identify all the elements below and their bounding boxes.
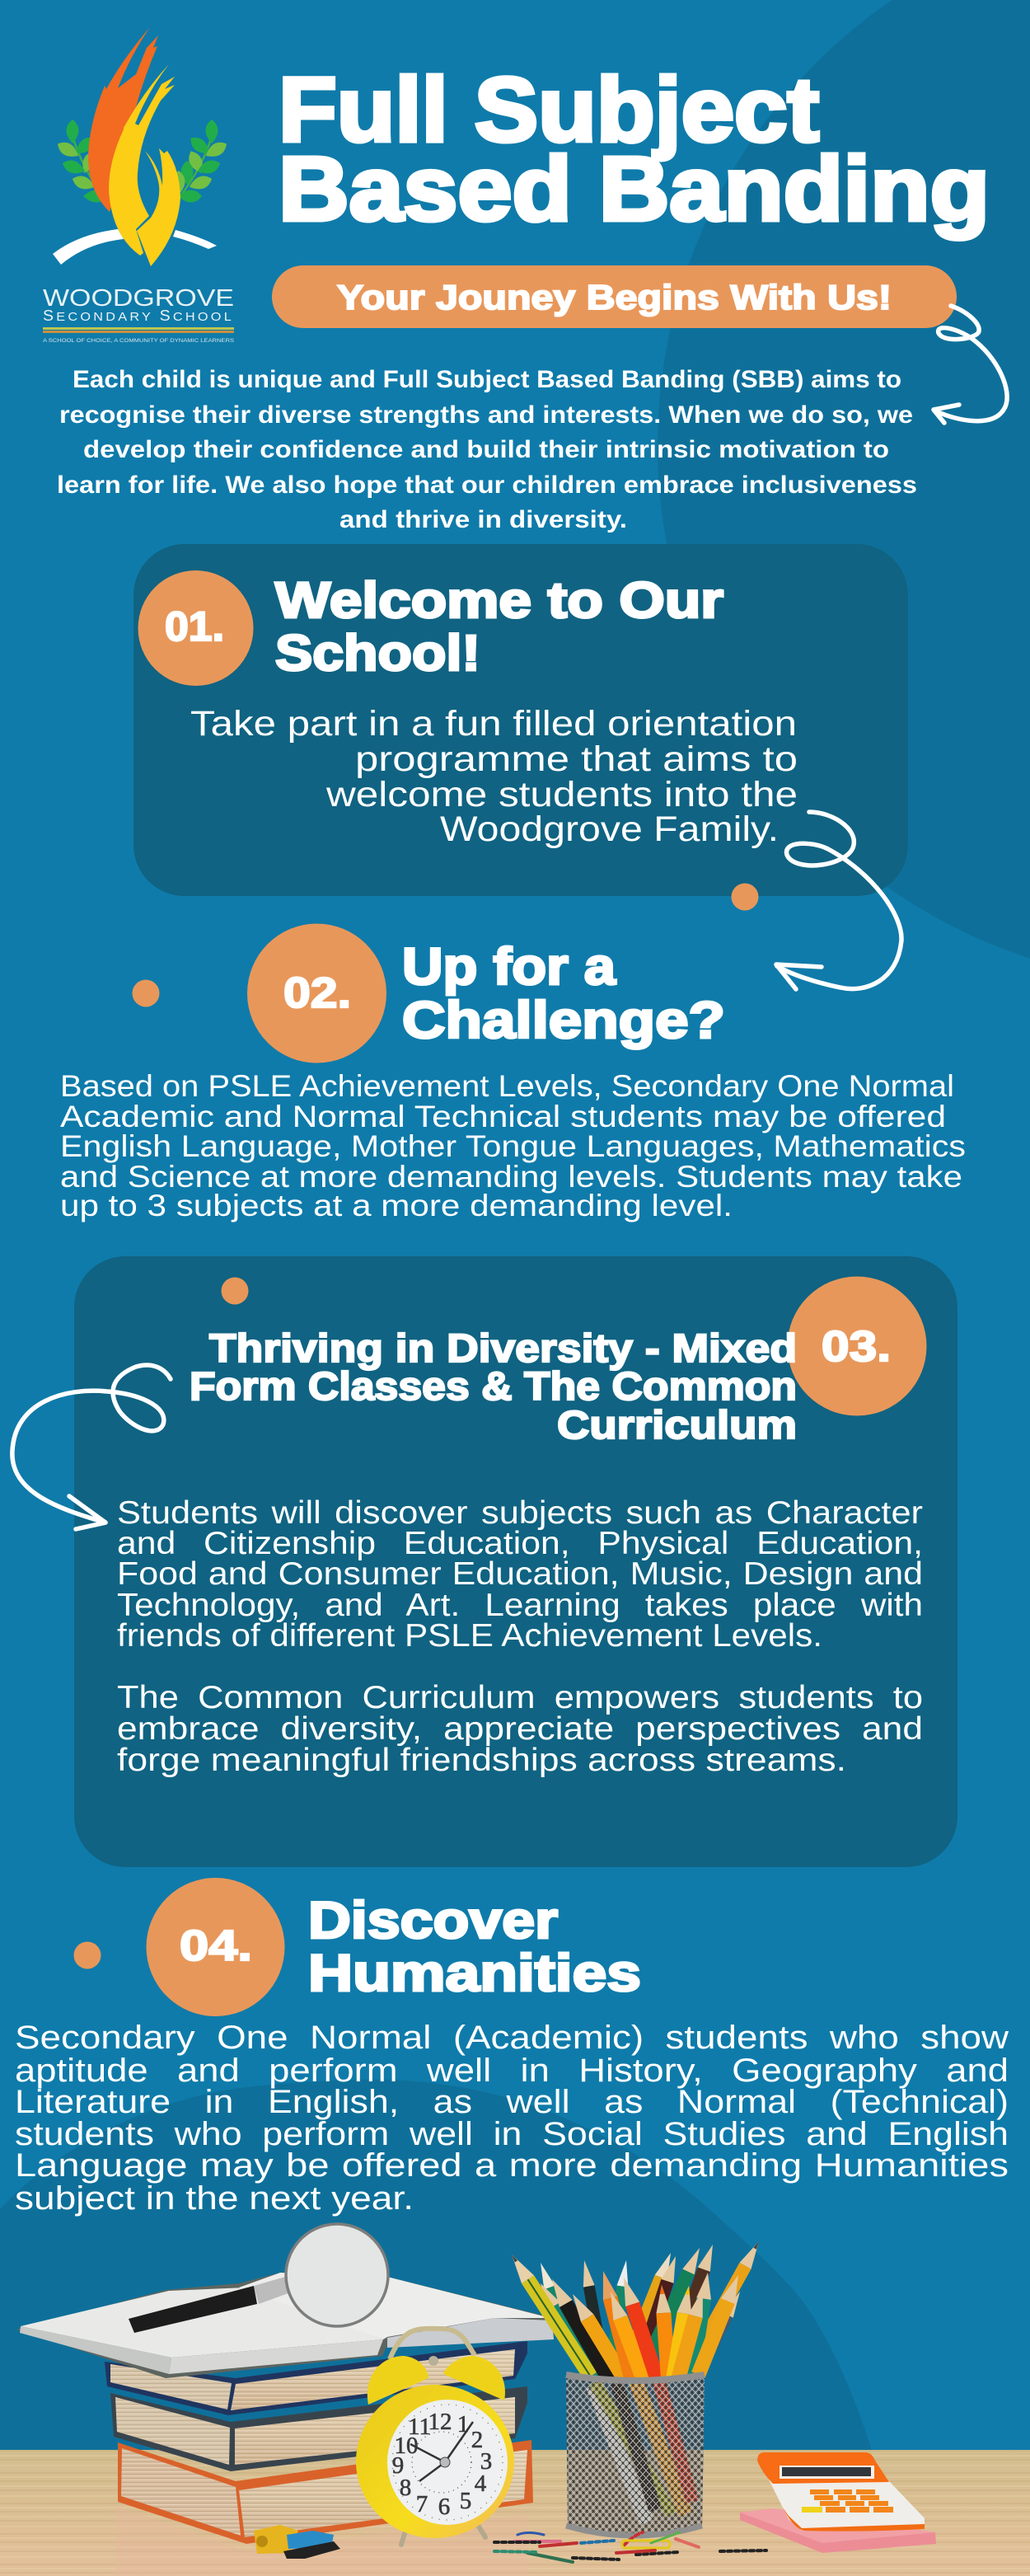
- heading 03: Form Classes & The Common: [190, 1365, 797, 1409]
- icon: white swoosh: [53, 229, 217, 265]
- clock numbers: 2: [471, 2427, 483, 2453]
- title: [279, 59, 990, 240]
- body 04: students who perform well in Social Studies and English: [15, 2116, 1009, 2152]
- body 01: Take part in a fun filled orientation: [190, 704, 797, 744]
- body 03 paragraph 2: embrace diversity, appreciate perspectives and: [117, 1711, 923, 1747]
- heading 04: Discover: [308, 1892, 558, 1950]
- clock numbers: 9: [392, 2452, 404, 2479]
- face: [387, 2400, 508, 2525]
- intro text: recognise their diverse strengths and interests. When we do so, we: [59, 401, 913, 429]
- icon: yellow flame right: [137, 148, 180, 266]
- body 03 paragraph 1: [117, 1495, 923, 1654]
- body 04: aptitude and perform well in History, Geography and: [15, 2053, 1009, 2089]
- body 01: [190, 704, 798, 849]
- body 03 paragraph 1: Food and Consumer Education, Music, Design and: [117, 1556, 923, 1592]
- feet: [401, 2522, 485, 2545]
- intro text: Each child is unique and Full Subject Based Banding (SBB) aims to: [73, 366, 901, 393]
- school name: WOODGROVE: [43, 285, 234, 312]
- body 01: Woodgrove Family.: [440, 809, 779, 849]
- number badge 03: 03.: [822, 1323, 891, 1371]
- illustration: stack of books: [16, 2273, 554, 2544]
- number badge 02: [247, 923, 386, 1063]
- title: Full Subject: [279, 59, 819, 161]
- bells: [368, 2356, 505, 2405]
- body 03 paragraph 1: Technology, and Art. Learning takes place with: [117, 1588, 923, 1623]
- heading 02: Challenge?: [402, 992, 725, 1049]
- icon: yellow flame left: [109, 64, 175, 256]
- heading 01: School!: [275, 625, 480, 681]
- illustration: paper clips: [494, 2532, 766, 2562]
- body 02: Based on PSLE Achievement Levels, Secondary One Normal: [60, 1069, 954, 1103]
- body 04: [15, 2020, 1009, 2217]
- pencils front: [505, 2250, 745, 2386]
- body 03 paragraph 2: [117, 1680, 923, 1778]
- body 02: and Science at more demanding levels. Students may take: [60, 1160, 962, 1194]
- body 01: programme that aims to: [355, 739, 798, 779]
- body 01: welcome students into the: [325, 775, 798, 814]
- school type: SECONDARY SCHOOL: [43, 307, 234, 324]
- intro text: learn for life. We also hope that our children embrace inclusiveness: [57, 472, 917, 499]
- intro text: and thrive in diversity.: [339, 506, 627, 533]
- book: open book on top: [16, 2273, 554, 2378]
- title: Based Banding: [279, 138, 990, 240]
- number badge 02: 02.: [283, 969, 351, 1017]
- calculator keys: [802, 2489, 893, 2513]
- subtitle pill: Your Jouney Begins With Us!: [337, 278, 892, 317]
- heading 03: Curriculum: [557, 1404, 797, 1448]
- clock numbers: [392, 2409, 492, 2520]
- arrow: curl from pill to intro: [934, 306, 1007, 423]
- dot: [732, 884, 758, 910]
- clock numbers: 11: [408, 2414, 431, 2440]
- heading 01: [275, 572, 723, 681]
- body 03 paragraph 2: forge meaningful friendships across streams.: [117, 1743, 846, 1778]
- body 04: subject in the next year.: [15, 2180, 414, 2217]
- clock numbers: 6: [438, 2494, 450, 2520]
- subtitle pill: [272, 265, 957, 328]
- book: navy top: [105, 2341, 527, 2415]
- heading 02: Up for a: [402, 938, 616, 996]
- illustration: magnifying glass: [129, 2217, 395, 2333]
- panel: section 03 diversity: [74, 1256, 957, 1867]
- heading 04: Humanities: [308, 1945, 641, 2002]
- heading 04: [308, 1892, 641, 2002]
- calculator top: [757, 2452, 889, 2484]
- notepad: [740, 2508, 936, 2553]
- body 03 paragraph 2: The Common Curriculum empowers students to: [117, 1680, 923, 1715]
- dot: [132, 979, 160, 1007]
- clock numbers: 4: [475, 2470, 487, 2497]
- body 03 paragraph 1: friends of different PSLE Achievement Levels.: [117, 1618, 822, 1654]
- arrow: curl into section 03: [12, 1365, 171, 1529]
- panel: section 01 welcome: [133, 544, 908, 896]
- illustration: alarm clock: [356, 2329, 514, 2545]
- clock numbers: 7: [416, 2491, 428, 2517]
- illustration: sharpeners: [254, 2525, 340, 2559]
- illustration: pencil cup: [505, 2238, 765, 2536]
- number badge 01: 01.: [165, 603, 224, 650]
- number badge 03: [788, 1276, 926, 1416]
- intro text: develop their confidence and build their intrinsic motivation to: [83, 436, 889, 463]
- hands: [410, 2422, 473, 2481]
- body 03 paragraph 1: and Citizenship Education, Physical Education,: [117, 1526, 923, 1561]
- body: [356, 2385, 514, 2538]
- handle: [390, 2329, 475, 2359]
- heading 03: [190, 1327, 797, 1448]
- body 02: English Language, Mother Tongue Languages, Mathematics: [60, 1129, 966, 1163]
- icon: orange flame: [88, 27, 158, 212]
- clock numbers: 3: [480, 2448, 492, 2475]
- section 04 header: [147, 1878, 641, 2016]
- calculator screen: [780, 2466, 874, 2479]
- intro text: [57, 366, 917, 533]
- heading 01: Welcome to Our: [275, 572, 723, 628]
- mesh holder: [566, 2375, 705, 2536]
- dot: [221, 1278, 249, 1304]
- body 04: Secondary One Normal (Academic) students who show: [15, 2020, 1009, 2056]
- logo: Woodgrove Secondary School: [43, 27, 235, 344]
- clock numbers: 12: [428, 2409, 452, 2435]
- body 04: Literature in English, as well as Normal (Technical): [15, 2084, 1009, 2120]
- body 02: up to 3 subjects at a more demanding level.: [60, 1189, 733, 1222]
- illustration: calculator on pink notepad: [740, 2452, 936, 2553]
- clock numbers: 8: [400, 2475, 411, 2501]
- table top: [0, 2450, 1030, 2576]
- body 02: [60, 1069, 966, 1222]
- dot: [74, 1942, 101, 1968]
- icon: laurel leaves: [54, 120, 230, 203]
- arrow: curl from section 01 to 02: [776, 812, 901, 989]
- logo stripes: [43, 327, 234, 333]
- clock numbers: 1: [457, 2411, 469, 2438]
- school motto: A SCHOOL OF CHOICE, A COMMUNITY OF DYNAMIC LEARNERS: [43, 338, 235, 344]
- pencils behind: [535, 2238, 765, 2386]
- number badge 04: 04.: [180, 1922, 252, 1970]
- book: orange bottom: [118, 2440, 533, 2544]
- section 02 header: [247, 923, 725, 1063]
- number badge 04: [147, 1878, 285, 2016]
- body 03 paragraph 1: Students will discover subjects such as Character: [117, 1495, 923, 1531]
- body 04: Language may be offered a more demanding Humanities: [15, 2147, 1009, 2184]
- book: dark grey middle: [110, 2386, 527, 2471]
- clock numbers: 5: [460, 2488, 471, 2514]
- calculator body: [757, 2456, 925, 2531]
- heading 02: [402, 938, 725, 1049]
- clock numbers: 10: [394, 2433, 419, 2459]
- heading 03: Thriving in Diversity - Mixed: [209, 1327, 797, 1371]
- number badge 01: [138, 570, 254, 686]
- body 02: Academic and Normal Technical students may be offered: [60, 1100, 946, 1133]
